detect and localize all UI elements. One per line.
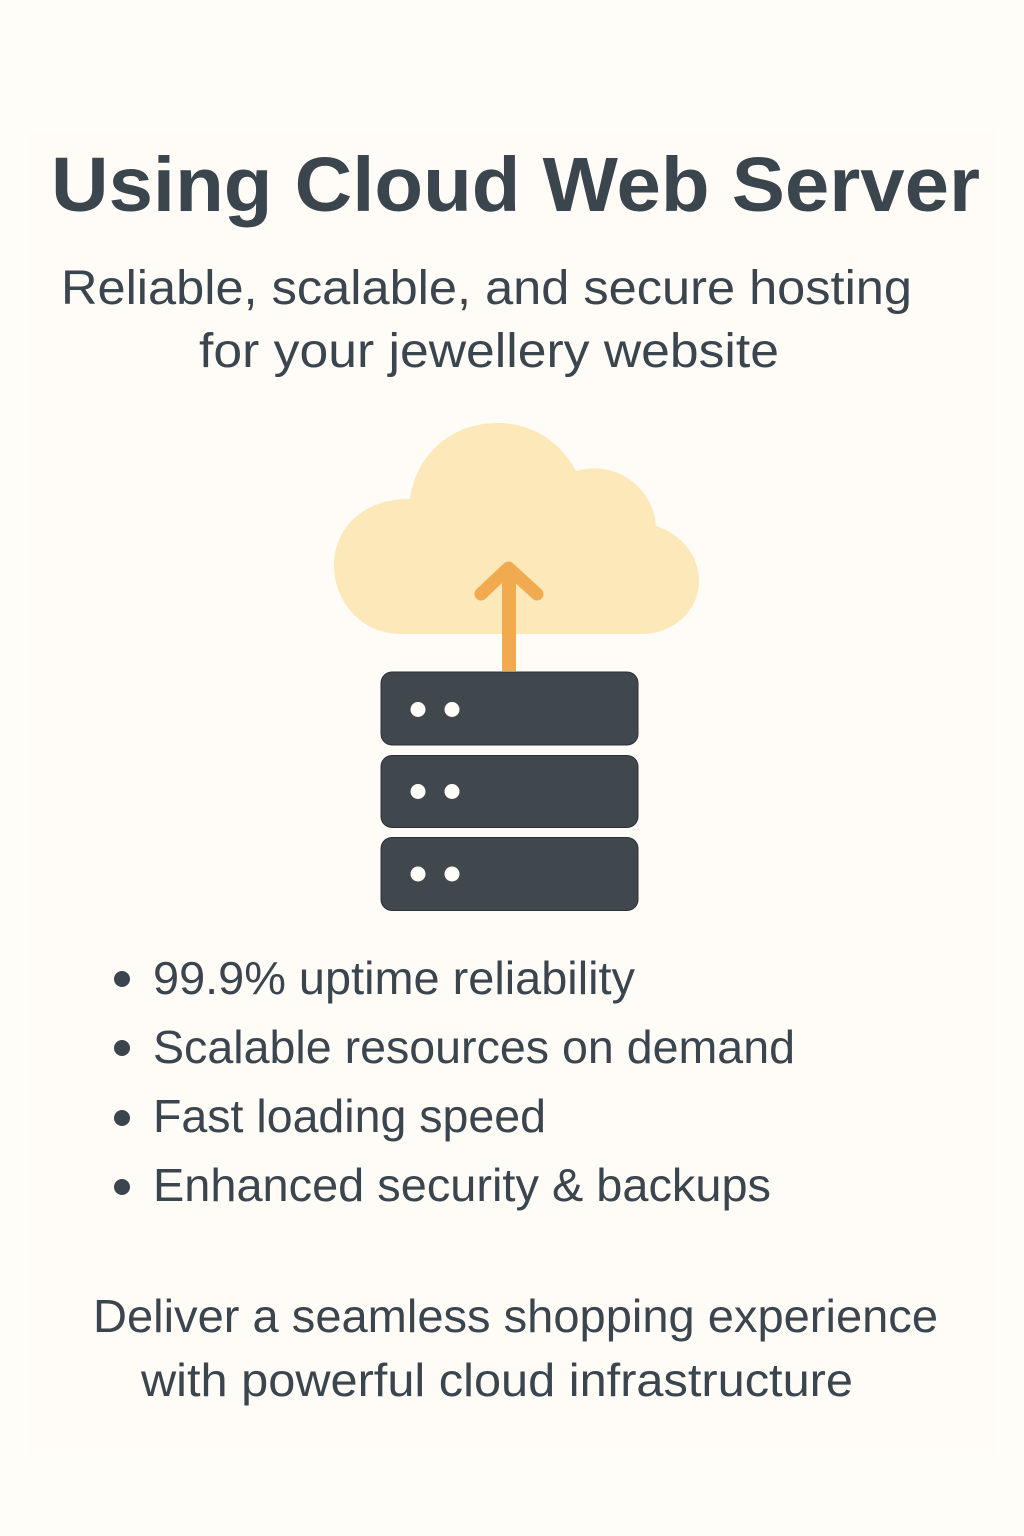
bullet: security: Enhanced security & backups	[153, 1159, 771, 1211]
subtitle: Reliable, scalable, and secure hosting	[61, 262, 912, 315]
closing statement: Deliver a seamless shopping experience	[93, 1290, 938, 1342]
feature list	[114, 952, 795, 1211]
bullet: scalable: Scalable resources on demand	[153, 1021, 795, 1073]
server unit 3	[381, 838, 638, 910]
server unit 2	[381, 756, 638, 828]
icon: upload arrow	[481, 568, 537, 671]
icon: cloud	[334, 423, 699, 634]
closing statement	[93, 1290, 938, 1406]
bullet: uptime: 99.9% uptime reliability	[153, 952, 635, 1004]
icon: server stack	[381, 672, 638, 910]
title: Using Cloud Web Server	[51, 142, 980, 228]
bullet: speed: Fast loading speed	[153, 1090, 546, 1142]
closing statement: with powerful cloud infrastructure	[140, 1354, 853, 1406]
subtitle: for your jewellery website	[199, 325, 779, 378]
server unit 1	[381, 672, 638, 745]
subtitle	[61, 262, 912, 378]
